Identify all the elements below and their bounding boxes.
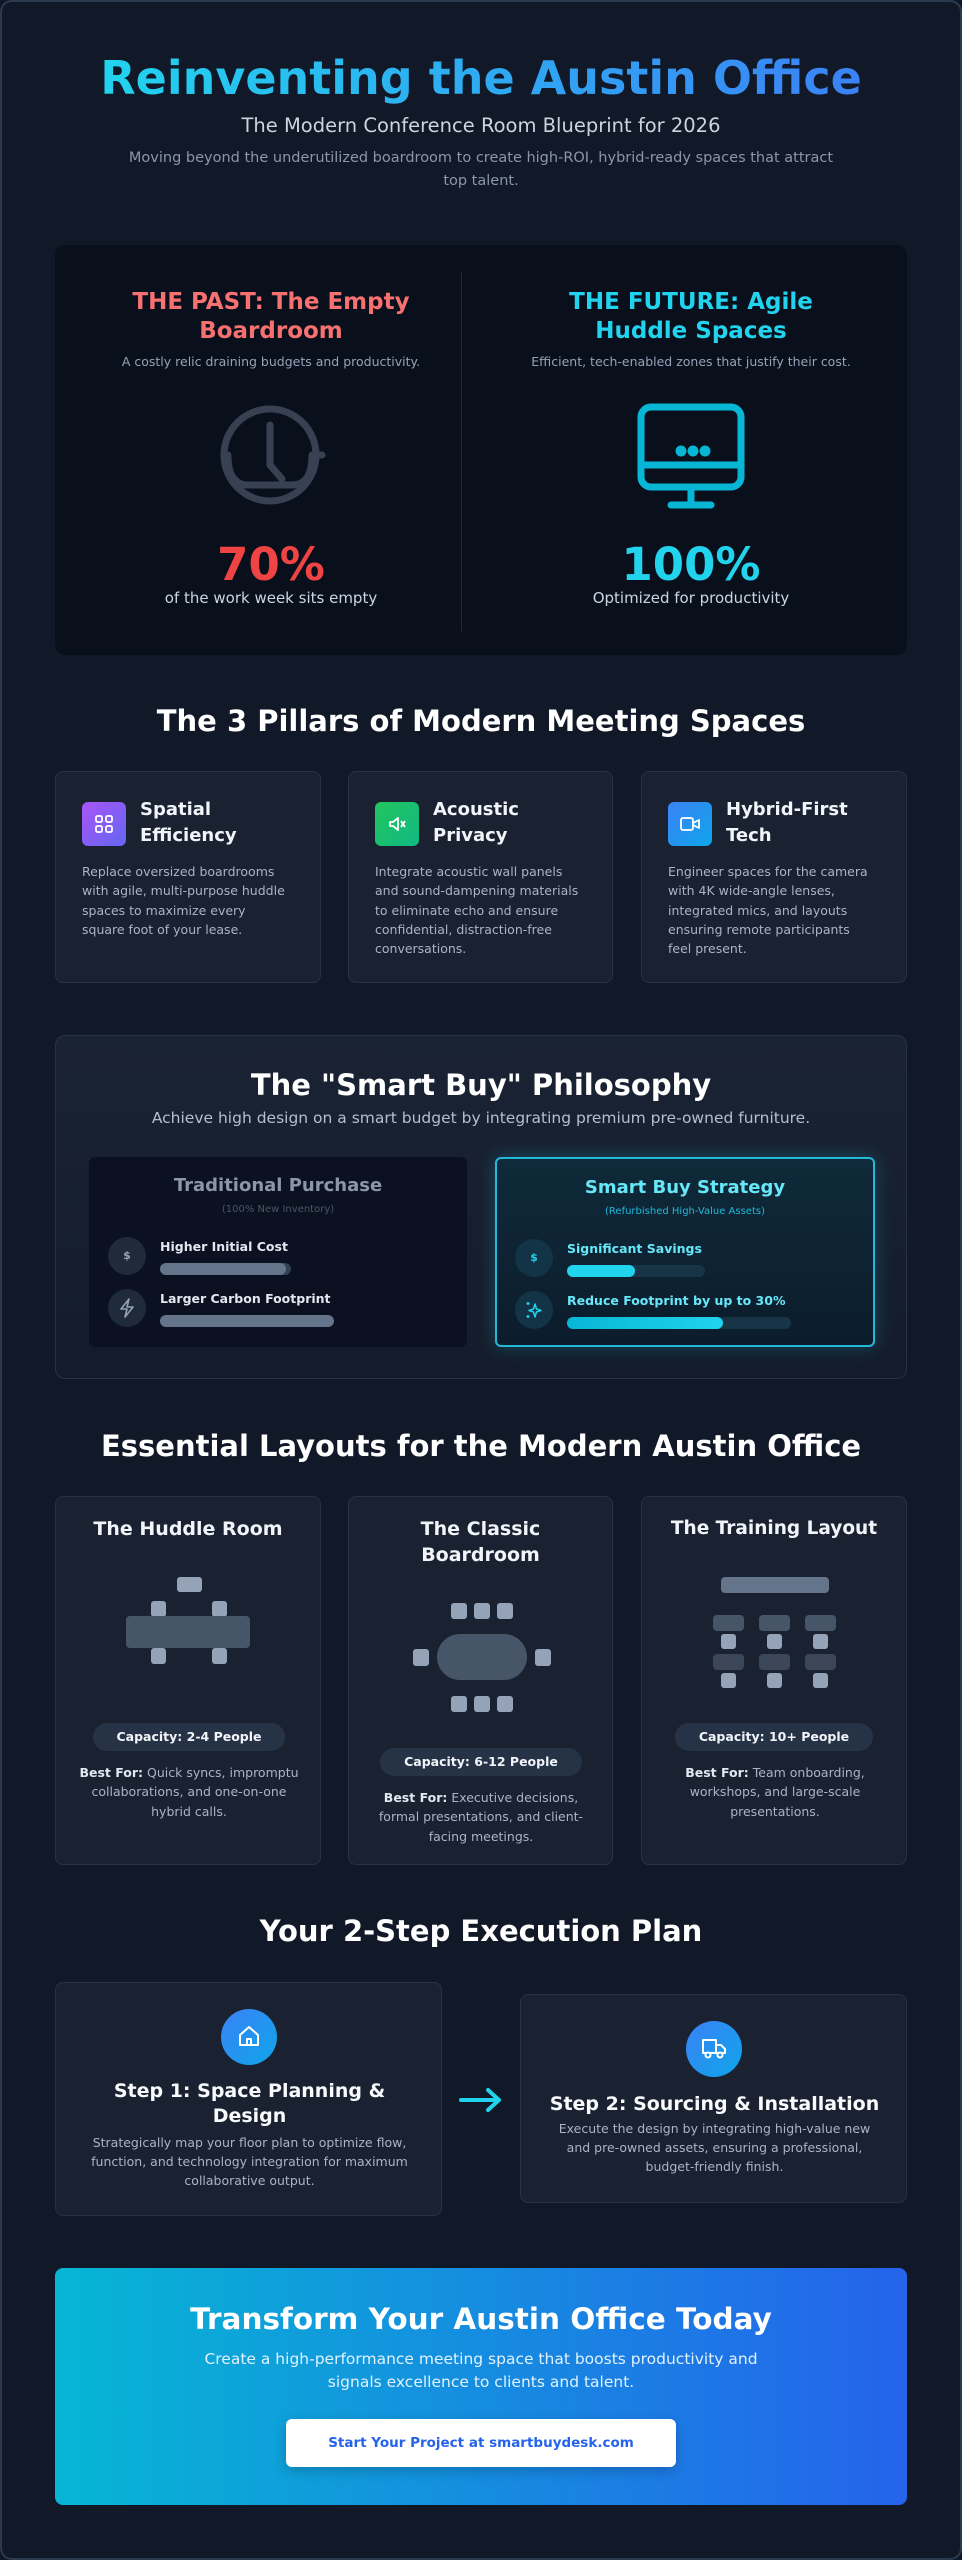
past caption: of the work week sits empty bbox=[165, 589, 377, 607]
panel: training layout bbox=[641, 1496, 907, 1865]
panel: huddle room: The Huddle Room bbox=[93, 1518, 283, 1540]
panel: call to action bbox=[55, 2268, 907, 2505]
smart buy subtext: Achieve high design on a smart budget by integrating premium pre-owned furniture. bbox=[152, 1109, 810, 1127]
row: carbon bbox=[108, 1289, 334, 1327]
panel: pillar spatial: Replace oversized boardrooms with agile, multi-purpose huddle spaces to maximize every square foot of your lease. bbox=[82, 864, 285, 937]
heading: pillars: The 3 Pillars of Modern Meeting Spaces bbox=[157, 704, 805, 738]
panel: pillar acoustic: Acoustic bbox=[433, 799, 519, 820]
row: cost bbox=[108, 1237, 291, 1275]
diagram: boardroom bbox=[413, 1603, 551, 1712]
button bbox=[286, 2419, 676, 2467]
row: cost: $ bbox=[123, 1249, 131, 1262]
row: footprint bbox=[515, 1291, 791, 1329]
stat 70%: 70% bbox=[217, 538, 325, 591]
icon: camera bbox=[668, 802, 712, 846]
panel: classic boardroom: Boardroom bbox=[421, 1544, 540, 1566]
past subtext: A costly relic draining budgets and productivity. bbox=[122, 354, 420, 369]
heading: execution plan: Your 2-Step Execution Plan bbox=[260, 1914, 702, 1948]
panel: pillar hybrid: Hybrid-First bbox=[726, 799, 848, 820]
panel: call to action: Create a high-performance meeting space that boosts productivity and signals excellence to clients and talent. bbox=[204, 2350, 758, 2391]
best for: Best For: Executive decisions, formal presentations, and client-facing meetings. bbox=[379, 1790, 583, 1844]
panel: pillar acoustic bbox=[348, 771, 613, 983]
future caption: Optimized for productivity bbox=[593, 589, 789, 607]
icon: truck bbox=[686, 2021, 742, 2077]
panel: step 2 bbox=[520, 1994, 907, 2203]
box: smart buy strategy: Smart Buy Strategy bbox=[585, 1177, 785, 1198]
panel: pillar acoustic: Integrate acoustic wall panels and sound-dampening materials to eliminate echo and ensure confidential, distraction-free conversations. bbox=[375, 864, 578, 956]
capacity pill bbox=[675, 1723, 873, 1751]
panel: training layout: The Training Layout bbox=[671, 1518, 877, 1539]
diagram: training bbox=[713, 1577, 836, 1688]
icon: grid bbox=[82, 802, 126, 846]
row: footprint: Reduce Footprint by up to 30% bbox=[567, 1293, 785, 1308]
panel: classic boardroom: The Classic bbox=[421, 1518, 540, 1540]
diagram: huddle bbox=[126, 1577, 250, 1664]
panel: pillar hybrid bbox=[641, 771, 907, 983]
panel: step 1 bbox=[55, 1982, 442, 2216]
panel: pillar spatial: Efficiency bbox=[140, 825, 237, 846]
capacity pill bbox=[93, 1723, 285, 1751]
row: carbon: Larger Carbon Footprint bbox=[160, 1291, 331, 1306]
panel: step 1: Strategically map your floor plan to optimize flow, function, and technology integration for maximum collaborative output. bbox=[91, 2135, 408, 2188]
box: traditional bbox=[89, 1157, 467, 1347]
row: savings bbox=[515, 1239, 705, 1277]
panel: classic boardroom bbox=[348, 1496, 613, 1865]
smart buy heading: The "Smart Buy" Philosophy bbox=[251, 1068, 711, 1102]
stat 100%: 100% bbox=[621, 538, 761, 591]
panel: step 2: Execute the design by integrating high-value new and pre-owned assets, ensuring a professional, budget-friendly finish. bbox=[559, 2121, 870, 2174]
box: traditional: Traditional Purchase bbox=[174, 1175, 382, 1196]
panel: step 1: Step 1: Space Planning & Design bbox=[114, 2080, 385, 2127]
panel: pillar acoustic: Privacy bbox=[433, 825, 508, 846]
capacity pill: Capacity: 6-12 People bbox=[404, 1754, 558, 1769]
panel: pillar hybrid: Tech bbox=[726, 825, 772, 846]
panel: huddle room bbox=[55, 1496, 321, 1865]
subtitle: The Modern Conference Room Blueprint for 2026 bbox=[242, 114, 720, 137]
icon: house bbox=[221, 2009, 277, 2065]
row: savings: $ bbox=[530, 1251, 538, 1264]
capacity pill: Capacity: 2-4 People bbox=[116, 1729, 262, 1744]
future heading: THE FUTURE: Agile Huddle Spaces bbox=[569, 289, 813, 344]
heading: layouts: Essential Layouts for the Modern Austin Office bbox=[101, 1429, 861, 1463]
panel: call to action: Transform Your Austin Office Today bbox=[190, 2302, 772, 2336]
future subtext: Efficient, tech-enabled zones that justify their cost. bbox=[531, 354, 851, 369]
icon: monitor bbox=[638, 404, 744, 508]
row: cost: Higher Initial Cost bbox=[160, 1239, 288, 1254]
panel: pillar spatial: Spatial bbox=[140, 799, 211, 820]
icon: speaker bbox=[375, 802, 419, 846]
panel: smart buy bbox=[55, 1035, 907, 1379]
panel: step 2: Step 2: Sourcing & Installation bbox=[550, 2093, 879, 2115]
panel: pillar hybrid: Engineer spaces for the camera with 4K wide-angle lenses, integrated mics, and layouts ensuring remote participants feel present. bbox=[668, 864, 868, 956]
title: Reinventing the Austin Office bbox=[100, 51, 862, 105]
capacity pill bbox=[380, 1748, 582, 1776]
best for: Best For: Quick syncs, impromptu collaborations, and one-on-one hybrid calls. bbox=[79, 1765, 299, 1819]
box: smart buy strategy: (Refurbished High-Value Assets) bbox=[605, 1206, 765, 1217]
past heading: THE PAST: The Empty Boardroom bbox=[132, 289, 410, 344]
box: smart buy strategy bbox=[495, 1157, 875, 1347]
panel: past vs future bbox=[55, 245, 907, 655]
arrow bbox=[459, 2088, 502, 2112]
capacity pill: Capacity: 10+ People bbox=[699, 1729, 849, 1744]
box: traditional: (100% New Inventory) bbox=[222, 1204, 334, 1215]
best for: Best For: Team onboarding, workshops, and large-scale presentations. bbox=[685, 1765, 865, 1819]
intro text: Moving beyond the underutilized boardroom to create high-ROI, hybrid-ready spaces that attract top talent. bbox=[129, 150, 833, 189]
icon: empty chair bbox=[220, 406, 326, 504]
row: savings: Significant Savings bbox=[567, 1241, 702, 1256]
panel: pillar spatial bbox=[55, 771, 321, 983]
button: Start Your Project at smartbuydesk.com bbox=[328, 2435, 634, 2451]
